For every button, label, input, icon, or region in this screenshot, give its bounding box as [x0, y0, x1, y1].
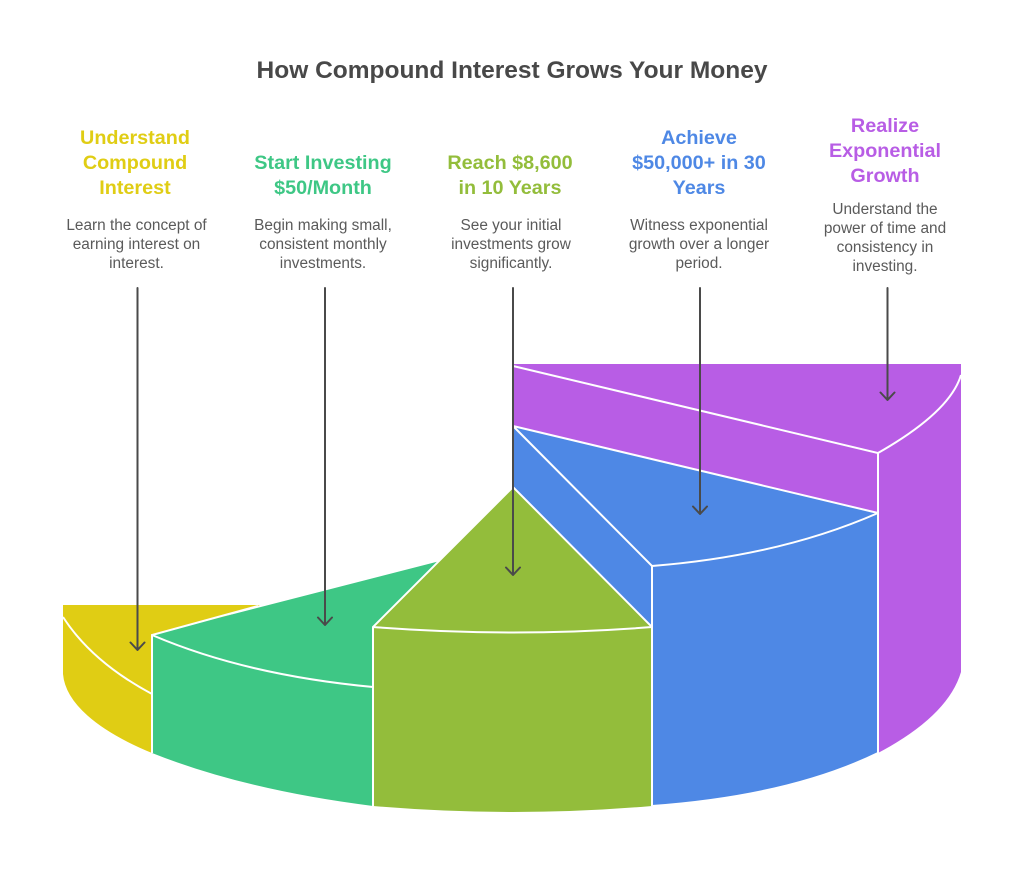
column 2 text: start investing	[254, 152, 392, 272]
description: start investing: investments.	[280, 255, 366, 272]
heading: reach $8,600: Reach $8,600	[447, 152, 573, 174]
arrow: start investing	[318, 288, 332, 625]
title: How Compound Interest Grows Your Money	[257, 57, 768, 84]
heading: understand compound interest: Compound	[83, 152, 187, 174]
description: understand compound interest: earning interest on	[73, 236, 200, 253]
heading: understand compound interest: Interest	[99, 177, 171, 199]
description: achieve $50,000+: Witness exponential	[630, 217, 768, 234]
description: realize exponential growth: investing.	[852, 258, 918, 275]
description: realize exponential growth: consistency in	[837, 239, 933, 256]
heading: realize exponential growth: Realize	[851, 115, 919, 137]
heading: achieve $50,000+: Years	[673, 177, 725, 199]
description: realize exponential growth: Understand the	[832, 201, 938, 218]
description: start investing: Begin making small,	[254, 217, 392, 234]
description: achieve $50,000+: growth over a longer	[629, 236, 769, 253]
heading: understand compound interest: Understand	[80, 127, 190, 149]
heading: realize exponential growth: Exponential	[829, 140, 941, 162]
3D pie chart	[63, 364, 961, 812]
column 4 text: achieve $50,000+	[629, 127, 769, 272]
arrow: realize exponential growth	[880, 288, 894, 400]
heading: start investing: $50/Month	[274, 177, 372, 199]
heading: reach $8,600: in 10 Years	[458, 177, 562, 199]
description: understand compound interest: interest.	[109, 255, 164, 272]
heading: realize exponential growth: Growth	[850, 165, 920, 187]
description: realize exponential growth: power of time and	[824, 220, 946, 237]
description: reach $8,600: See your initial	[461, 217, 561, 234]
segment: purple	[513, 364, 961, 753]
description: achieve $50,000+: period.	[675, 255, 723, 272]
heading: start investing: Start Investing	[254, 152, 392, 174]
arrow: achieve $50,000+	[693, 288, 707, 514]
segment: green	[152, 561, 440, 806]
description: reach $8,600: significantly.	[470, 255, 552, 272]
description: reach $8,600: investments grow	[451, 236, 572, 253]
segment: blue	[513, 426, 878, 806]
segment: olive	[373, 487, 652, 812]
description: start investing: consistent monthly	[259, 236, 387, 253]
column 3 text: reach $8,600	[447, 152, 573, 272]
heading: achieve $50,000+: Achieve	[661, 127, 737, 149]
column 1 text: understand compound interest	[66, 127, 207, 272]
column 5 text: realize exponential growth	[824, 115, 946, 275]
description: understand compound interest: Learn the concept of	[66, 217, 207, 234]
segment: yellow	[63, 605, 260, 753]
heading: achieve $50,000+: $50,000+ in 30	[632, 152, 766, 174]
arrow: understand compound interest	[130, 288, 144, 650]
arrow: reach $8,600	[506, 288, 520, 575]
